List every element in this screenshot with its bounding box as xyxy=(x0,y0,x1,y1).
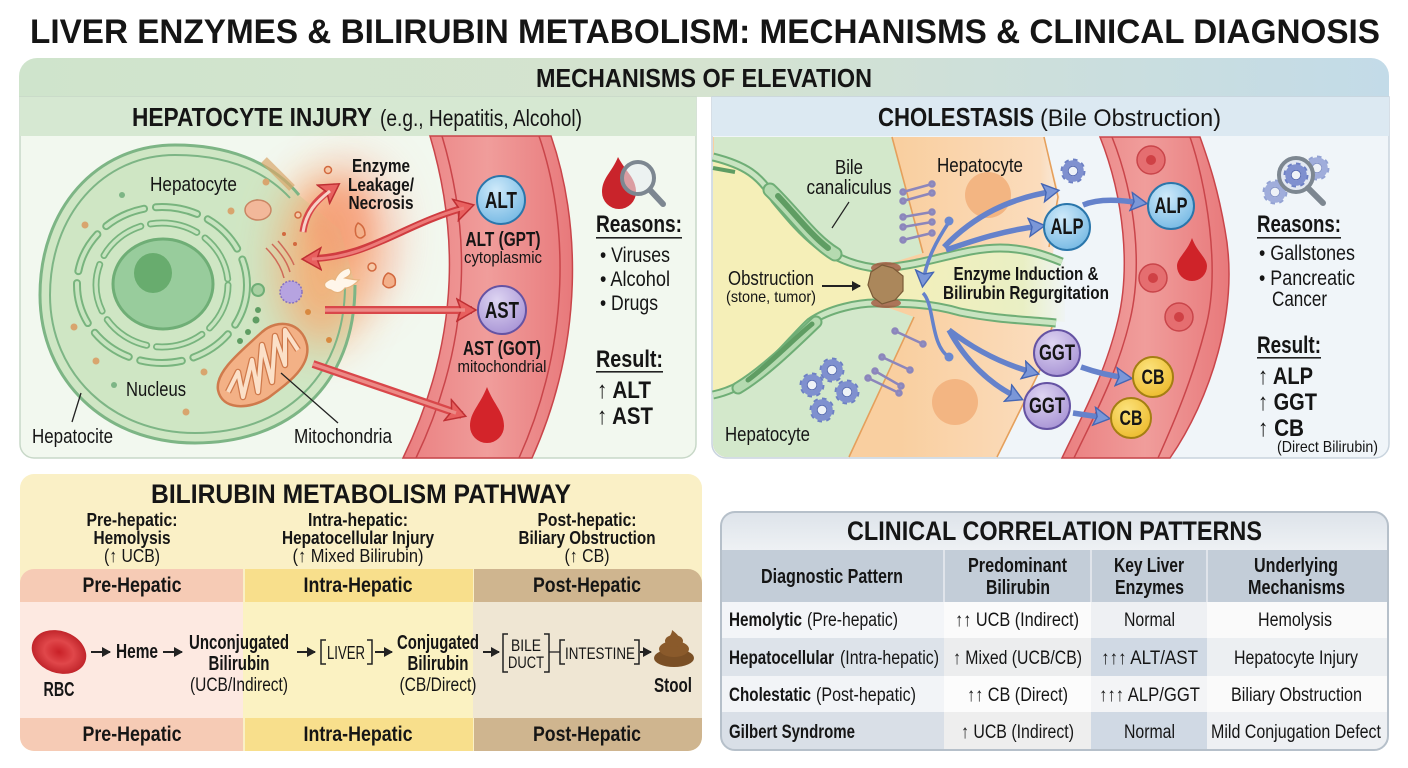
icon: red blood cell xyxy=(26,623,92,701)
AST enzyme: AST xyxy=(485,297,519,323)
tissue labels: (stone, tumor) xyxy=(726,289,816,306)
row: cholestatic: (Post-hepatic) xyxy=(816,685,916,706)
panel: mechanisms of elevation xyxy=(19,58,1389,458)
arrow: to blood drop xyxy=(313,364,462,415)
panel: clinical correlation table xyxy=(721,512,1388,750)
table cell backgrounds xyxy=(721,550,1388,750)
enzyme GGT upper: GGT xyxy=(1039,340,1075,365)
reasons list: Reasons: xyxy=(1257,211,1341,238)
ALT enzyme xyxy=(477,176,525,224)
gears lower xyxy=(802,360,857,420)
cell labels: Nucleus xyxy=(126,379,186,401)
enzyme induction label: Enzyme Induction & xyxy=(954,263,1098,284)
reasons list: • Drugs xyxy=(600,292,658,315)
stage note: intra-hepatic: Intra-hepatic: xyxy=(308,509,408,530)
vessel xyxy=(1062,137,1229,458)
top zone labels xyxy=(82,573,641,597)
row: cholestatic: Cholestatic xyxy=(729,685,811,706)
reasons list: • Alcohol xyxy=(600,268,670,291)
AST label: mitochondrial xyxy=(458,357,546,376)
table outline xyxy=(721,512,1388,750)
mitochondrion xyxy=(218,324,307,406)
blue arrows xyxy=(923,191,1143,418)
heading: clinical correlation: CLINICAL CORRELATION PATTERNS xyxy=(847,516,1262,546)
table header row: Mechanisms xyxy=(1248,577,1345,599)
conjugated bilirubin xyxy=(397,632,479,696)
row: cholestatic: ↑↑ CB (Direct) xyxy=(967,685,1068,706)
nucleus xyxy=(113,239,213,329)
row: hepatocellular: Hepatocyte Injury xyxy=(1234,648,1358,669)
heading: hepatocyte injury xyxy=(132,102,582,132)
heading: cholestasis: (Bile Obstruction) xyxy=(1040,105,1221,132)
row: cholestatic xyxy=(729,685,1362,706)
gear upper xyxy=(1063,161,1083,181)
icon: gears and magnifier xyxy=(1265,158,1327,203)
ALT label xyxy=(464,229,542,267)
result list: Result: xyxy=(1257,332,1321,359)
CB lower xyxy=(1111,398,1151,438)
tissue labels xyxy=(725,155,1023,446)
table header row xyxy=(761,555,1345,599)
arrow: ALT double-headed xyxy=(306,206,470,259)
conjugated bilirubin: Bilirubin xyxy=(408,653,468,675)
enzyme ALP in blood xyxy=(1148,183,1194,229)
hepatocyte tissue xyxy=(713,137,1065,457)
AST enzyme xyxy=(478,286,526,334)
leakage label: Leakage/ xyxy=(348,175,414,195)
top zone labels: Post-Hepatic xyxy=(533,573,641,597)
icon: blood drop xyxy=(470,387,504,443)
row: hepatocellular: Hepatocellular xyxy=(729,648,834,669)
hepatocyte cell xyxy=(40,145,370,443)
obstruction stone xyxy=(868,262,903,308)
row: hepatocellular: ↑ Mixed (UCB/CB) xyxy=(953,648,1082,669)
row: cholestatic: Biliary Obstruction xyxy=(1231,685,1362,706)
stage note: pre-hepatic: Pre-hepatic: xyxy=(86,509,178,530)
row: gilbert: Mild Conjugation Defect xyxy=(1211,722,1382,743)
unconjugated bilirubin: (UCB/Indirect) xyxy=(190,675,288,696)
enzyme GGT upper xyxy=(1034,330,1080,376)
AST label xyxy=(458,338,546,376)
stage note: post-hepatic xyxy=(518,509,656,566)
stage note: pre-hepatic xyxy=(86,509,178,566)
unconjugated bilirubin xyxy=(189,632,289,696)
reasons list xyxy=(596,211,682,315)
cell labels xyxy=(32,174,393,448)
row: hemolytic xyxy=(729,610,1332,631)
enzyme ALP lower: ALP xyxy=(1050,214,1084,239)
row: gilbert: Gilbert Syndrome xyxy=(729,722,855,743)
tissue labels: Hepatocyte xyxy=(937,155,1023,177)
reasons list xyxy=(1257,211,1355,311)
bottom zone labels xyxy=(82,722,641,746)
bile duct box: BILE xyxy=(511,636,541,655)
ALT label: ALT (GPT) xyxy=(466,229,540,251)
panel: hepatocyte injury xyxy=(20,97,696,458)
arrow: to AST xyxy=(325,306,472,314)
enzyme induction label xyxy=(943,263,1109,303)
leakage label: Necrosis xyxy=(348,193,414,213)
top zone labels: Intra-Hepatic xyxy=(304,573,413,597)
row: hepatocellular: ↑↑↑ ALT/AST xyxy=(1101,648,1198,669)
icon: red blood cell: RBC xyxy=(44,679,74,701)
liver box: LIVER xyxy=(327,643,365,663)
stage note: intra-hepatic xyxy=(282,509,435,566)
heading: hepatocyte injury: (e.g., Hepatitis, Alcohol) xyxy=(380,105,582,131)
bottom zone labels: Post-Hepatic xyxy=(533,722,641,746)
heading: bilirubin pathway: BILIRUBIN METABOLISM PATHWAY xyxy=(151,479,571,509)
enzyme ALP lower xyxy=(1044,204,1090,250)
necrosis glow xyxy=(307,160,397,310)
conjugated bilirubin: (CB/Direct) xyxy=(400,675,476,696)
ALT enzyme: ALT xyxy=(485,187,517,213)
panel: cholestasis xyxy=(712,97,1389,458)
row: cholestatic: ↑↑↑ ALP/GGT xyxy=(1099,685,1200,706)
table header row: Predominant xyxy=(968,555,1067,577)
enzyme induction label: Bilirubin Regurgitation xyxy=(943,282,1109,303)
bile duct box xyxy=(503,634,549,672)
row: hemolytic: Hemolysis xyxy=(1258,610,1332,631)
stage note: post-hepatic: (↑ CB) xyxy=(564,545,610,566)
result list: Result: xyxy=(596,346,663,373)
tissue labels: Obstruction xyxy=(728,268,814,290)
row: gilbert: Normal xyxy=(1124,722,1175,743)
organelle dots xyxy=(70,178,332,416)
arrow: leakage up xyxy=(303,186,336,232)
bile duct box: DUCT xyxy=(508,653,544,672)
stage note: post-hepatic: Biliary Obstruction xyxy=(518,527,656,548)
row: gilbert xyxy=(729,722,1382,743)
result list: (Direct Bilirubin) xyxy=(1277,439,1378,456)
table header row: Diagnostic Pattern xyxy=(761,566,903,588)
debris and torn membrane xyxy=(245,166,395,293)
AST label: AST (GOT) xyxy=(463,338,541,360)
stage note: intra-hepatic: Hepatocellular Injury xyxy=(282,527,435,548)
table header row: Key Liver xyxy=(1114,555,1184,577)
intestine box: INTESTINE xyxy=(565,644,635,663)
flow arrows xyxy=(91,651,651,653)
ALT label: cytoplasmic xyxy=(464,248,542,267)
reasons list: Reasons: xyxy=(596,211,682,238)
CB upper: CB xyxy=(1142,366,1164,389)
transporters upper xyxy=(900,182,934,242)
enzyme ALP in blood: ALP xyxy=(1154,193,1188,218)
bottom zone labels: Pre-Hepatic xyxy=(82,722,182,746)
heme: Heme xyxy=(116,641,158,663)
heading: hepatocyte injury: HEPATOCYTE INJURY xyxy=(132,102,372,132)
table header row: Bilirubin xyxy=(986,577,1050,599)
leakage label: Enzyme xyxy=(352,156,410,176)
arrow: obstruction xyxy=(822,285,860,287)
liver box xyxy=(321,640,372,664)
row: hemolytic: (Pre-hepatic) xyxy=(807,610,898,631)
red blood cells xyxy=(1137,146,1193,331)
CB lower: CB xyxy=(1120,407,1142,430)
top zone labels: Pre-Hepatic xyxy=(82,573,182,597)
tissue labels: Hepatocyte xyxy=(725,424,810,446)
row: hemolytic: Normal xyxy=(1124,610,1175,631)
title: LIVER ENZYMES & BILIRUBIN METABOLISM: MECHANISMS & CLINICAL DIAGNOSIS xyxy=(30,13,1380,51)
tissue labels: Bile xyxy=(835,157,863,179)
reasons list: • Pancreatic xyxy=(1259,267,1355,290)
zone backgrounds xyxy=(20,569,702,751)
cell labels: Hepatocyte xyxy=(150,174,237,196)
enzyme GGT lower xyxy=(1024,383,1070,429)
stage note: post-hepatic: Post-hepatic: xyxy=(538,509,636,530)
icon: blood drop in vessel xyxy=(1177,238,1207,281)
result list xyxy=(1257,332,1378,456)
bile duct walls xyxy=(713,157,1062,395)
row: hepatocellular xyxy=(729,648,1358,669)
result list: ↑ GGT xyxy=(1258,389,1317,416)
CB upper xyxy=(1133,357,1173,397)
endoplasmic reticulum xyxy=(77,207,247,363)
cell labels: Hepatocite xyxy=(32,426,113,448)
unconjugated bilirubin: Unconjugated xyxy=(189,632,289,654)
cell labels: Mitochondria xyxy=(294,426,393,448)
table header row: Enzymes xyxy=(1115,577,1184,599)
stage note: pre-hepatic: (↑ UCB) xyxy=(104,545,160,566)
row: hemolytic: Hemolytic xyxy=(729,610,802,631)
result list xyxy=(596,346,663,430)
stage note: pre-hepatic: Hemolysis xyxy=(94,527,170,548)
icon: stool xyxy=(654,630,694,697)
conjugated bilirubin: Conjugated xyxy=(397,632,479,654)
leakage label xyxy=(348,156,414,213)
row: hepatocellular: (Intra-hepatic) xyxy=(840,648,939,669)
heading: cholestasis: CHOLESTASIS xyxy=(878,102,1034,132)
bottom zone labels: Intra-Hepatic xyxy=(304,722,413,746)
reasons list: • Viruses xyxy=(600,244,670,267)
icon: stool: Stool xyxy=(654,675,692,697)
result list: ↑ CB xyxy=(1258,415,1304,442)
row: hemolytic: ↑↑ UCB (Indirect) xyxy=(955,610,1079,631)
intestine box xyxy=(560,640,639,664)
unconjugated bilirubin: Bilirubin xyxy=(208,653,270,675)
stage note: intra-hepatic: (↑ Mixed Bilirubin) xyxy=(292,545,424,566)
heading: cholestasis xyxy=(878,102,1221,132)
row: gilbert: ↑ UCB (Indirect) xyxy=(961,722,1074,743)
reasons list: Cancer xyxy=(1272,288,1327,311)
panel: bilirubin pathway xyxy=(20,474,702,751)
transporters lower xyxy=(866,328,926,396)
icon: drop and magnifier xyxy=(602,157,663,209)
result list: ↑ ALT xyxy=(597,377,651,404)
heading: mechanisms of elevation: MECHANISMS OF ELEVATION xyxy=(536,63,872,93)
table header row: Underlying xyxy=(1254,555,1338,577)
tissue labels: canaliculus xyxy=(806,177,892,199)
enzyme GGT lower: GGT xyxy=(1029,393,1065,418)
result list: ↑ ALP xyxy=(1258,363,1313,390)
blood vessel xyxy=(403,136,572,458)
result list: ↑ AST xyxy=(597,403,653,430)
reasons list: • Gallstones xyxy=(1259,242,1355,265)
